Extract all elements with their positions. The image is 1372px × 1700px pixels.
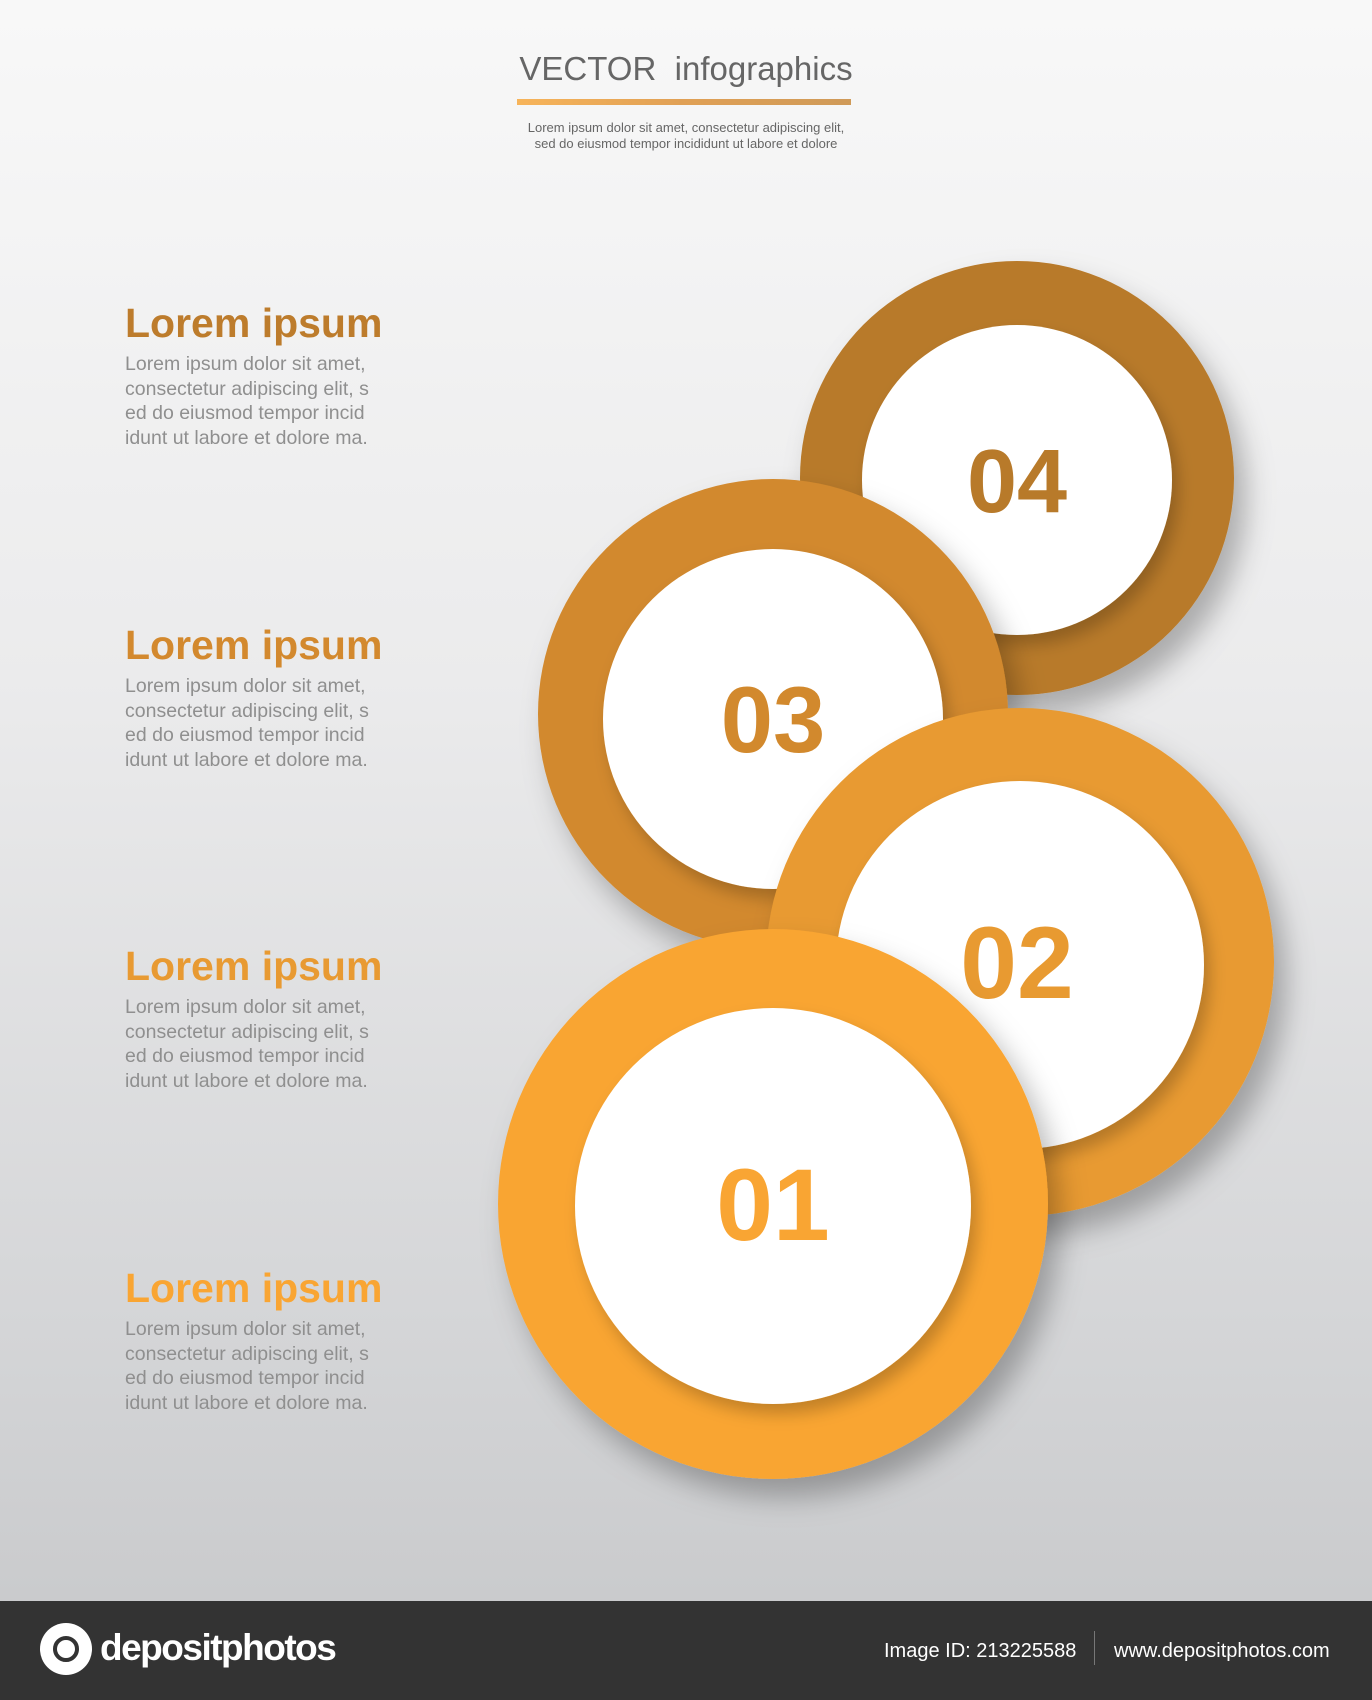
title underline	[517, 99, 851, 105]
text block 03: Lorem ipsum	[125, 622, 382, 668]
logo text: depositphotos	[100, 1627, 335, 1668]
text block 02	[125, 943, 382, 1092]
text block 01	[125, 1265, 382, 1414]
text block 02: Lorem ipsum dolor sit amet,	[125, 996, 366, 1018]
circle 02	[766, 708, 1274, 1216]
subtitle: Lorem ipsum dolor sit amet, consectetur adipiscing elit,	[528, 120, 844, 135]
text block 04: consectetur adipiscing elit, s	[125, 378, 369, 400]
text block 01: consectetur adipiscing elit, s	[125, 1342, 369, 1364]
text block 04: Lorem ipsum dolor sit amet,	[125, 353, 366, 375]
text block 04: idunt ut labore et dolore ma.	[125, 426, 368, 448]
text block 02: ed do eiusmod tempor incid	[125, 1045, 365, 1067]
subtitle	[528, 120, 844, 150]
text block 01: Lorem ipsum	[125, 1265, 382, 1311]
circle 01: 01	[716, 1148, 830, 1262]
text block 03: idunt ut labore et dolore ma.	[125, 748, 368, 770]
text block 04	[125, 300, 382, 448]
subtitle: sed do eiusmod tempor incididunt ut labore et dolore	[535, 136, 837, 150]
text block 02: consectetur adipiscing elit, s	[125, 1020, 369, 1042]
text block 03	[125, 622, 382, 770]
text block 01: idunt ut labore et dolore ma.	[125, 1392, 368, 1414]
website	[1094, 1631, 1095, 1665]
circle 04	[800, 261, 1234, 695]
text block 01: Lorem ipsum dolor sit amet,	[125, 1318, 366, 1340]
circle 01	[498, 929, 1048, 1479]
circle 03: 03	[721, 667, 825, 772]
logo icon	[40, 1623, 92, 1675]
text block 04: ed do eiusmod tempor incid	[125, 402, 365, 424]
text block 03: consectetur adipiscing elit, s	[125, 700, 369, 722]
text block 02: Lorem ipsum	[125, 943, 382, 989]
text block 03: ed do eiusmod tempor incid	[125, 724, 365, 746]
text block 01: ed do eiusmod tempor incid	[125, 1367, 365, 1389]
text block 03: Lorem ipsum dolor sit amet,	[125, 675, 366, 697]
title: VECTOR infographics	[519, 50, 853, 87]
circle 04: 04	[967, 432, 1067, 532]
text block 02: idunt ut labore et dolore ma.	[125, 1070, 368, 1092]
footer bar	[0, 1601, 1372, 1700]
text block 04: Lorem ipsum	[125, 300, 382, 346]
footer bar: www.depositphotos.com	[1114, 1640, 1330, 1662]
circle 02: 02	[960, 906, 1074, 1020]
image id: Image ID: 213225588	[884, 1640, 1076, 1662]
circle 03	[538, 479, 1008, 949]
